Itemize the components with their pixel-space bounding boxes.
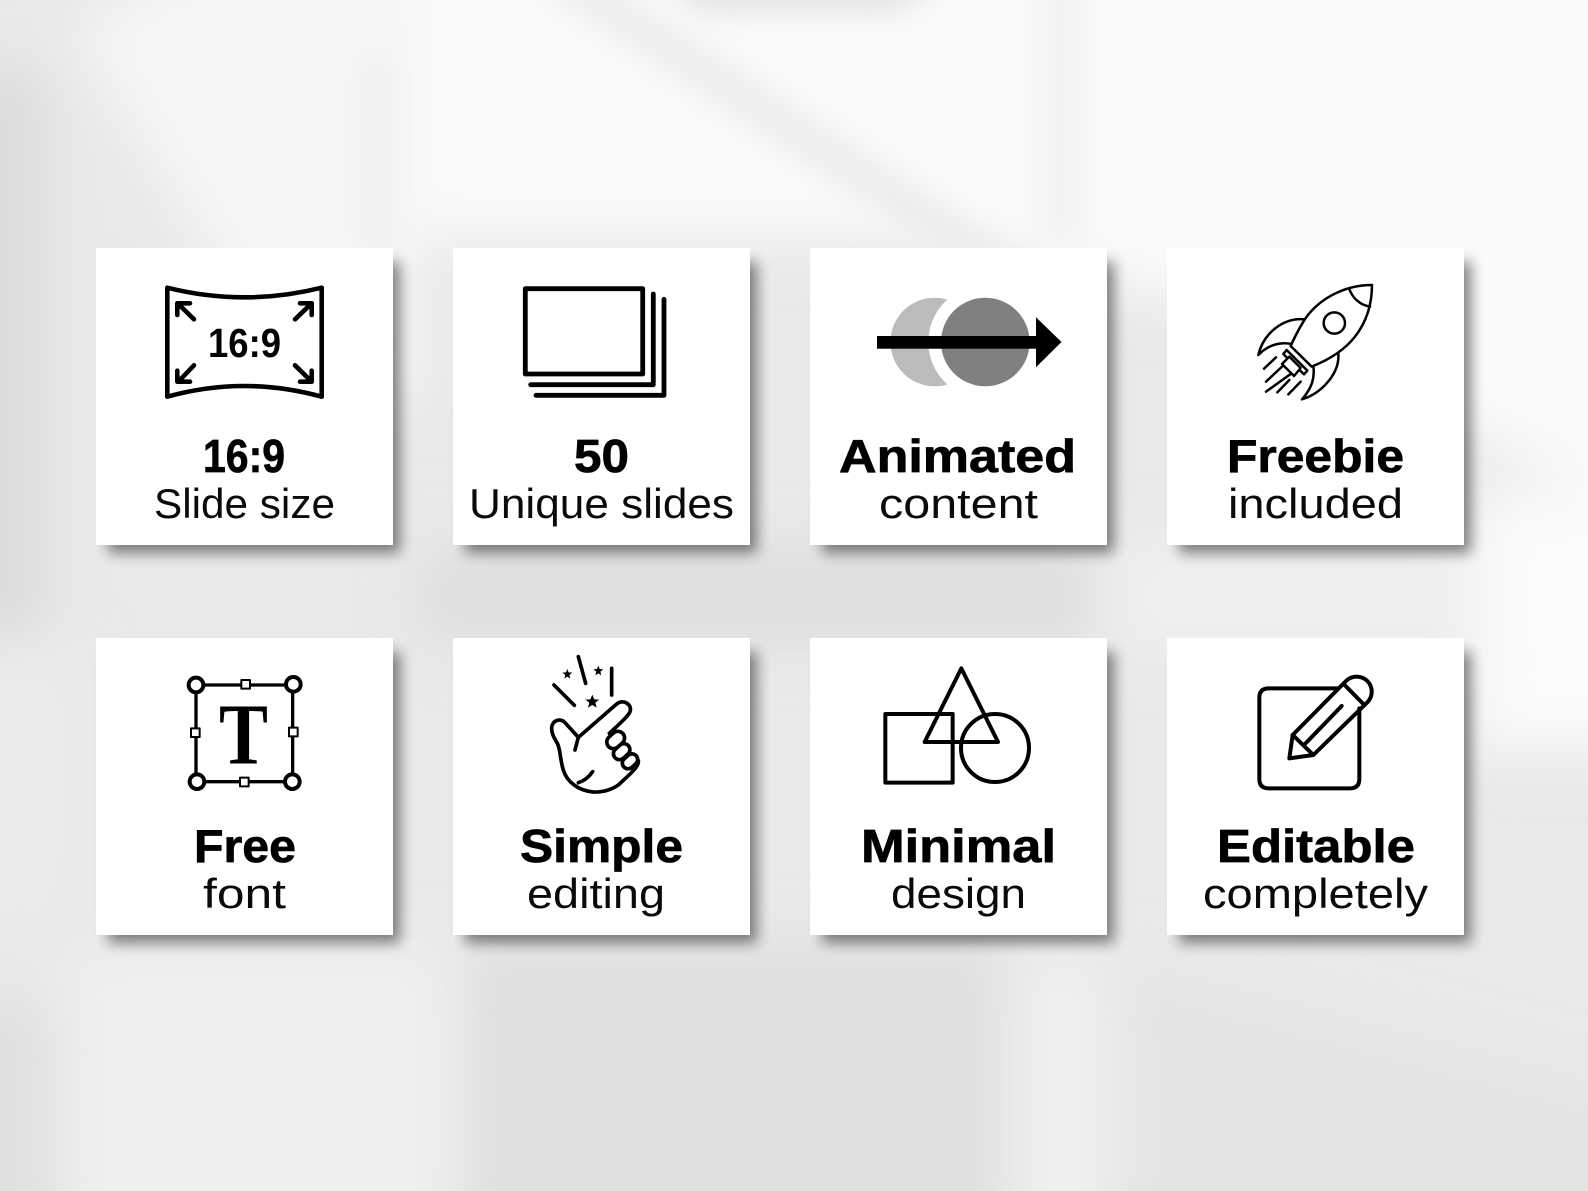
heading: 16:9: 16:9 [203,430,285,482]
heading: Simple: Simple [520,820,683,872]
icon: curved widescreen with expand arrows [167,288,322,397]
heading: Animated: Animated [839,430,1076,482]
heading: 50: 50 [574,430,629,482]
icon: finger snap [552,657,640,792]
card: simple editing [453,638,757,943]
icon: rocket [1258,285,1372,399]
card: editable completely [1167,638,1471,943]
text: design: design [891,870,1026,917]
card: minimal design [810,638,1114,943]
text: Unique slides: Unique slides [469,480,734,527]
text: content: content [879,480,1038,527]
text: editing: editing [527,870,665,917]
heading: Minimal: Minimal [861,820,1056,872]
icon: text bounding box with letter T [189,677,301,789]
text: font: font [203,870,286,917]
heading: Freebie: Freebie [1227,430,1404,482]
text: completely: completely [1203,870,1428,917]
icon: curved widescreen with expand arrows: 16:9 [208,320,281,366]
icon: text bounding box with letter T: T [219,686,268,782]
icon: moving circles with arrow [877,285,1062,399]
card: free font [96,638,400,943]
heading: Free: Free [194,820,296,872]
card: animated content [810,248,1114,553]
heading: Editable: Editable [1217,820,1415,872]
icon: pencil on square [1259,677,1372,788]
text: Slide size: Slide size [154,480,335,527]
icon: stacked slides [525,289,664,395]
text: included: included [1228,480,1403,527]
card: 16:9 slide size [96,248,400,553]
icon: square, triangle and circle [885,668,1029,783]
card: freebie included [1167,248,1471,553]
card: 50 unique slides [453,248,757,553]
